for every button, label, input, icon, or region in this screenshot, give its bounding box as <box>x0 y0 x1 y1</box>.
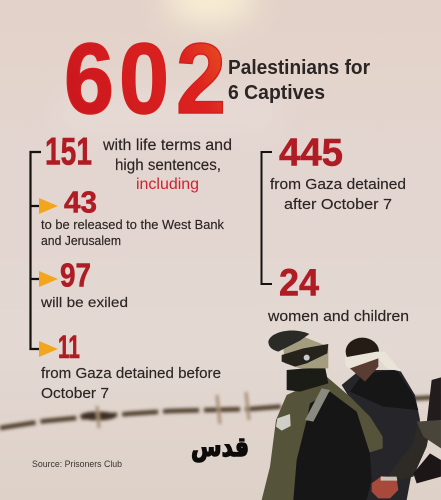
left bracket <box>30 152 41 349</box>
prisoner <box>342 338 430 500</box>
stat: 11 <box>41 329 221 402</box>
title: subtitle: 6 Captives <box>228 82 325 104</box>
stat: 11: 11 <box>58 329 80 365</box>
stat: 151: 151 <box>45 130 92 174</box>
title: subtitle <box>228 57 370 104</box>
title: 602: 0 <box>119 23 169 135</box>
stat: 43: to be released to the West Bank <box>41 218 225 232</box>
stat: 97: 97 <box>60 256 91 294</box>
stat: 43: and Jerusalem <box>41 234 121 248</box>
stat: 24 <box>267 262 409 325</box>
photo: soldier and prisoner <box>262 331 441 500</box>
title: subtitle: Palestinians for <box>228 57 370 79</box>
stat: 445 <box>270 132 406 213</box>
stat: 151: including <box>136 176 199 193</box>
arrow: 97 <box>39 271 58 287</box>
stat: 43: 43 <box>64 184 97 220</box>
stat: 445: 445 <box>279 132 343 174</box>
stat: 151: with life terms and <box>102 137 232 154</box>
logo: قدس <box>191 432 249 463</box>
stat: 24: women and children <box>267 309 409 325</box>
arrow: 43 <box>39 198 58 214</box>
stat: 24: 24 <box>279 262 319 304</box>
stat: 445: after October 7 <box>284 196 392 213</box>
soldier <box>262 331 383 500</box>
stat: 445: from Gaza detained <box>270 176 406 193</box>
title: 602: 2 <box>176 23 226 135</box>
source: Source: Prisoners Club <box>32 459 122 469</box>
right bracket <box>262 152 272 284</box>
stat: 151: high sentences, <box>115 157 221 174</box>
stat: 151 <box>45 130 232 193</box>
title: 602 <box>64 23 226 135</box>
title: 602: 6 <box>64 23 114 135</box>
stat: 11: from Gaza detained before <box>41 366 221 382</box>
stat: 43 <box>41 184 225 248</box>
stat: 97 <box>40 256 128 310</box>
soldier on right edge <box>413 377 441 483</box>
stat: 11: October 7 <box>41 386 109 402</box>
barbed wire <box>0 392 441 428</box>
stat: 97: will be exiled <box>40 294 128 310</box>
arrow: 11 <box>39 341 58 357</box>
